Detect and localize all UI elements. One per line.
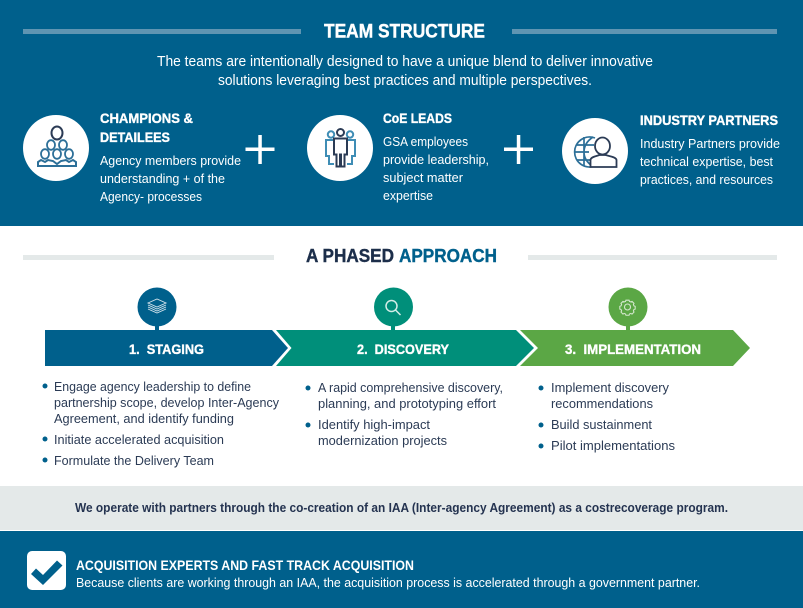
panel: acquisition experts (0, 531, 803, 608)
icon: plus one (246, 135, 274, 164)
text: coe leads (383, 111, 489, 203)
list: implementation: Build sustainment (551, 417, 652, 432)
band: co-creation statement: We operate with partners through the co-creation of an IAA (Inter-agency Agreement) as a costrecoverage program. (75, 500, 728, 515)
list: implementation (538, 380, 675, 453)
text: coe leads: CoE LEADS (383, 111, 452, 126)
text: coe leads: expertise (383, 188, 433, 203)
text: champions and detailees: Agency- processes (100, 189, 202, 204)
heading: a phased approach: A PHASED (306, 246, 394, 266)
list: discovery (306, 380, 503, 448)
list: discovery: planning, and prototyping effort (318, 396, 496, 411)
panel: team structure (0, 0, 803, 226)
intro text (157, 54, 653, 89)
icon: plus two (504, 135, 533, 164)
list: staging: Initiate accelerated acquisition (54, 432, 224, 447)
list: implementation: recommendations (551, 396, 653, 411)
list: implementation: Implement discovery (551, 380, 669, 395)
list: staging: Engage agency leadership to define (54, 379, 251, 394)
text: acquisition description: Because clients are working through an IAA, the acquisition process is accelerated through a government partner. (76, 575, 700, 590)
arrow: discovery (276, 288, 534, 366)
list: discovery: A rapid comprehensive discovery, (318, 380, 503, 395)
text: champions and detailees (100, 111, 241, 204)
heading: acquisition experts: ACQUISITION EXPERTS AND FAST TRACK ACQUISITION (76, 557, 414, 573)
icon: checkbox (27, 551, 66, 590)
list: staging: Formulate the Delivery Team (54, 453, 214, 468)
text: coe leads: GSA employees (383, 134, 468, 149)
text: coe leads: subject matter (383, 170, 464, 185)
label: staging: 1. STAGING (129, 341, 204, 357)
text: champions and detailees: understanding + of the (100, 171, 225, 186)
text: coe leads: provide leadership, (383, 152, 489, 167)
list: implementation: Pilot implementations (551, 438, 675, 453)
list: staging: Agreement, and identify funding (54, 411, 234, 426)
text: champions and detailees: CHAMPIONS & (100, 111, 193, 126)
text: industry partners: INDUSTRY PARTNERS (640, 113, 778, 128)
list: staging: partnership scope, develop Inter-Agency (54, 395, 279, 410)
icon: champions group (23, 115, 89, 181)
list: staging (42, 379, 279, 468)
list: discovery: Identify high-impact (318, 417, 430, 432)
label: implementation: 3. IMPLEMENTATION (565, 341, 701, 357)
icon: industry partners globe and person (562, 118, 628, 184)
icon: magnifier (386, 300, 400, 315)
intro text: solutions leveraging best practices and multiple perspectives. (218, 73, 592, 89)
band: co-creation statement (0, 486, 803, 530)
icon: coe leads team (307, 115, 373, 181)
panel: phased approach (23, 246, 777, 468)
icon: layers (148, 299, 166, 313)
heading: a phased approach (306, 246, 497, 266)
list: discovery: modernization projects (318, 433, 447, 448)
text: industry partners (640, 113, 780, 187)
text: industry partners: practices, and resources (640, 172, 773, 187)
icon: gear (620, 300, 635, 315)
arrow: staging (45, 288, 288, 366)
text: industry partners: technical expertise, best (640, 154, 773, 169)
label: discovery: 2. DISCOVERY (357, 341, 450, 357)
heading: a phased approach: APPROACH (399, 246, 497, 266)
text: champions and detailees: DETAILEES (100, 130, 170, 145)
text: industry partners: Industry Partners provide (640, 136, 780, 151)
text: champions and detailees: Agency members provide (100, 153, 241, 168)
heading: team structure: TEAM STRUCTURE (324, 22, 485, 42)
arrow: implementation (520, 288, 750, 366)
intro text: The teams are intentionally designed to have a unique blend to deliver innovative (157, 54, 653, 70)
